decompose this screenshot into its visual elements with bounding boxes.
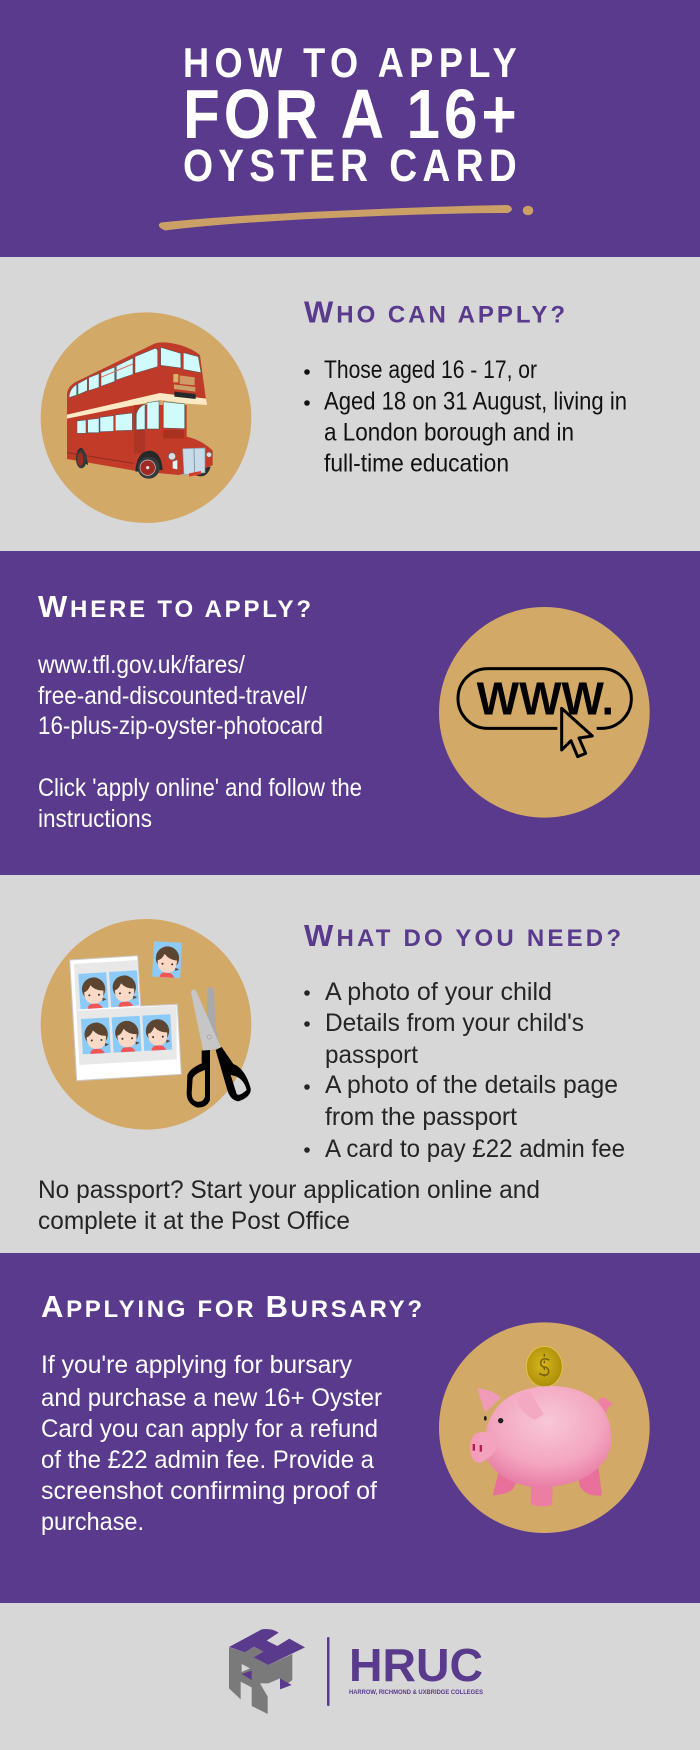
bursary text: purchase. <box>41 1508 144 1536</box>
bursary text: screenshot confirming proof of <box>41 1477 377 1505</box>
icon: piggy bank with coin <box>439 1322 650 1533</box>
bullet list: what you need: passport <box>325 1041 418 1069</box>
bursary text: Card you can apply for a refund <box>41 1415 378 1443</box>
bullet list: what you need: A photo of the details page <box>325 1071 618 1099</box>
title: HOW TO APPLY <box>183 41 517 87</box>
heading: where to apply: WHERE TO APPLY? <box>38 589 312 624</box>
bursary text: and purchase a new 16+ Oyster <box>41 1384 382 1412</box>
icon: passport photos and scissors <box>41 919 251 1130</box>
url and instructions text <box>37 651 362 833</box>
url and instructions text: Click 'apply online' and follow the <box>38 774 362 802</box>
url and instructions text: www.tfl.gov.uk/fares/ <box>37 651 245 679</box>
heading: applying for bursary: APPLYING FOR BURSARY? <box>41 1289 423 1324</box>
logo: HRUC wordmark: HARROW, RICHMOND & UXBRIDGE COLLEGES <box>349 1689 484 1696</box>
bullet list: who: Aged 18 on 31 August, living in <box>324 388 627 416</box>
bullet list: who: Those aged 16 - 17, or <box>324 356 537 384</box>
icon: www address bar and cursor <box>439 607 650 818</box>
bullet list: who: full-time education <box>324 450 509 478</box>
url and instructions text: instructions <box>38 805 152 833</box>
bullet list: what you need: A card to pay £22 admin fee <box>325 1135 625 1163</box>
bullet list: who: a London borough and in <box>324 418 574 446</box>
panel: what do you need <box>0 875 700 1253</box>
panel: who can apply <box>0 257 700 551</box>
title <box>183 41 517 191</box>
bullet list: what you need: A photo of your child <box>325 978 552 1006</box>
heading: who can apply: WHO CAN APPLY? <box>304 294 566 330</box>
url and instructions text: 16-plus-zip-oyster-photocard <box>38 712 323 740</box>
bullet list: what you need: Details from your child's <box>325 1009 584 1037</box>
url and instructions text: free-and-discounted-travel/ <box>38 682 307 710</box>
bullet list: what you need <box>304 978 625 1163</box>
title: FOR A 16+ <box>183 75 517 153</box>
note: no passport: complete it at the Post Office <box>38 1207 350 1235</box>
logo: HRUC cube mark <box>229 1629 305 1714</box>
icon: red bus <box>41 312 251 523</box>
panel: where to apply <box>0 551 700 875</box>
bursary text <box>41 1351 382 1536</box>
bursary text: If you're applying for bursary <box>41 1351 352 1379</box>
logo divider <box>327 1637 330 1706</box>
underline brush stroke <box>159 205 533 230</box>
icon: www address bar and cursor: WWW. <box>477 672 614 724</box>
note: no passport <box>38 1176 540 1235</box>
heading: what do you need: WHAT DO YOU NEED? <box>304 918 622 953</box>
bullet list: who <box>304 356 627 478</box>
panel: footer <box>0 1603 700 1750</box>
bursary text: of the £22 admin fee. Provide a <box>41 1446 374 1474</box>
note: no passport: No passport? Start your application online and <box>38 1176 540 1204</box>
panel: applying for bursary <box>0 1253 700 1603</box>
title: OYSTER CARD <box>183 140 517 191</box>
panel: header <box>0 0 700 257</box>
logo: HRUC wordmark: HRUC <box>349 1639 483 1691</box>
bullet list: what you need: from the passport <box>325 1103 517 1131</box>
